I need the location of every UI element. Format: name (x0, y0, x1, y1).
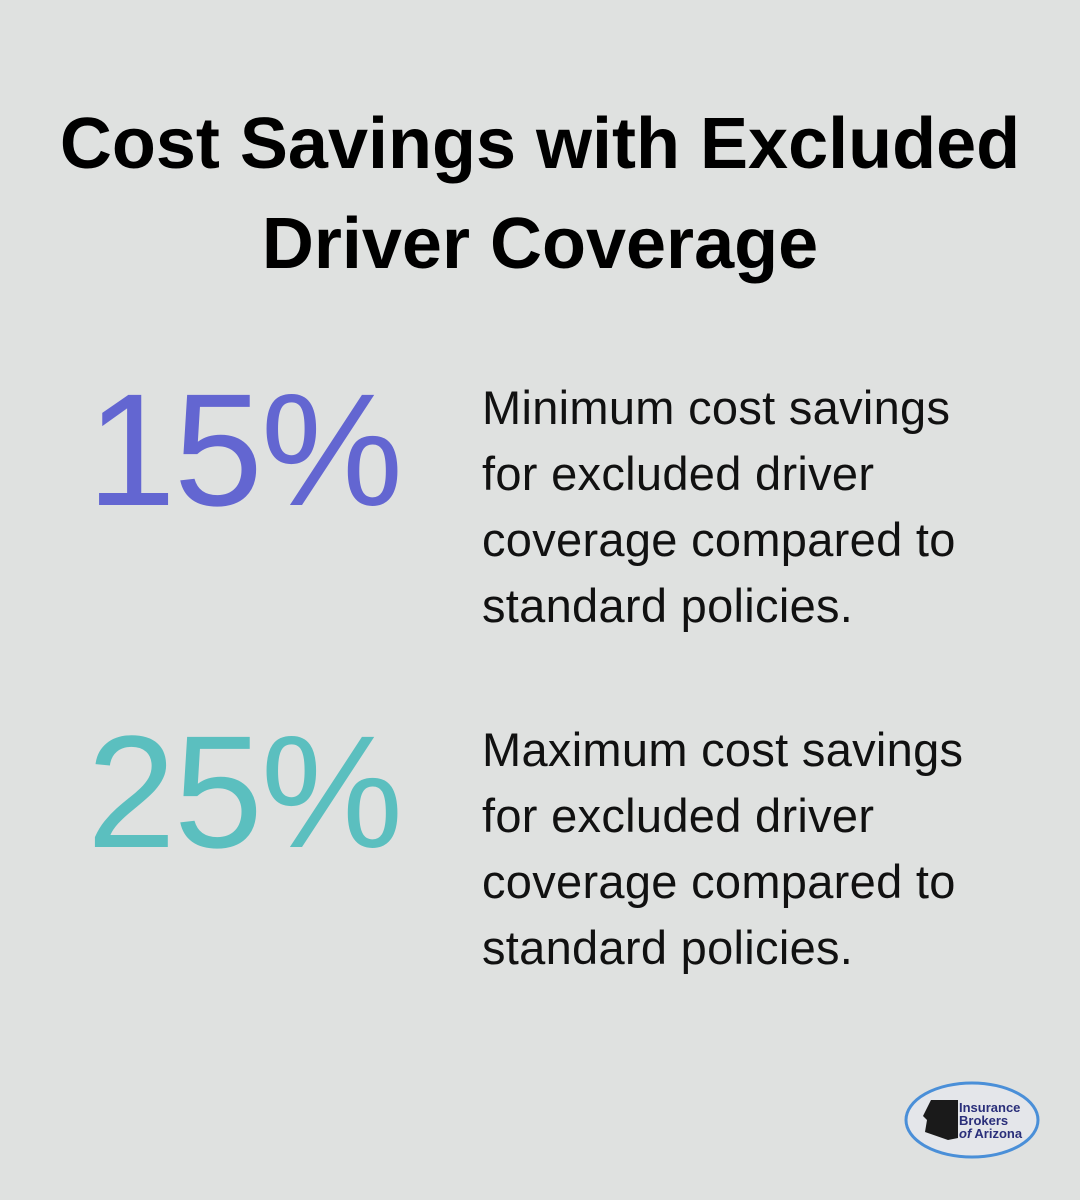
description 25%: standard policies. (482, 921, 853, 974)
title (60, 104, 1020, 284)
description 15% (482, 381, 956, 632)
number 15%: 15% (87, 360, 401, 539)
description 25%: coverage compared to (482, 855, 956, 908)
description 15%: coverage compared to (482, 513, 956, 566)
description 25%: Maximum cost savings (482, 723, 963, 776)
description 15%: for excluded driver (482, 447, 874, 500)
description 15%: Minimum cost savings (482, 381, 950, 434)
logo (904, 1082, 1040, 1158)
description 25%: for excluded driver (482, 789, 874, 842)
description 25% (482, 723, 963, 974)
stat: 25% (87, 702, 963, 974)
logo: of Arizona (959, 1126, 1023, 1141)
title: Cost Savings with Excluded (60, 104, 1020, 184)
number 25%: 25% (87, 702, 401, 881)
stat: 15% (87, 360, 956, 632)
logo: Brokers (959, 1113, 1008, 1128)
description 15%: standard policies. (482, 579, 853, 632)
logo: Insurance (959, 1100, 1020, 1115)
title: Driver Coverage (262, 204, 818, 284)
